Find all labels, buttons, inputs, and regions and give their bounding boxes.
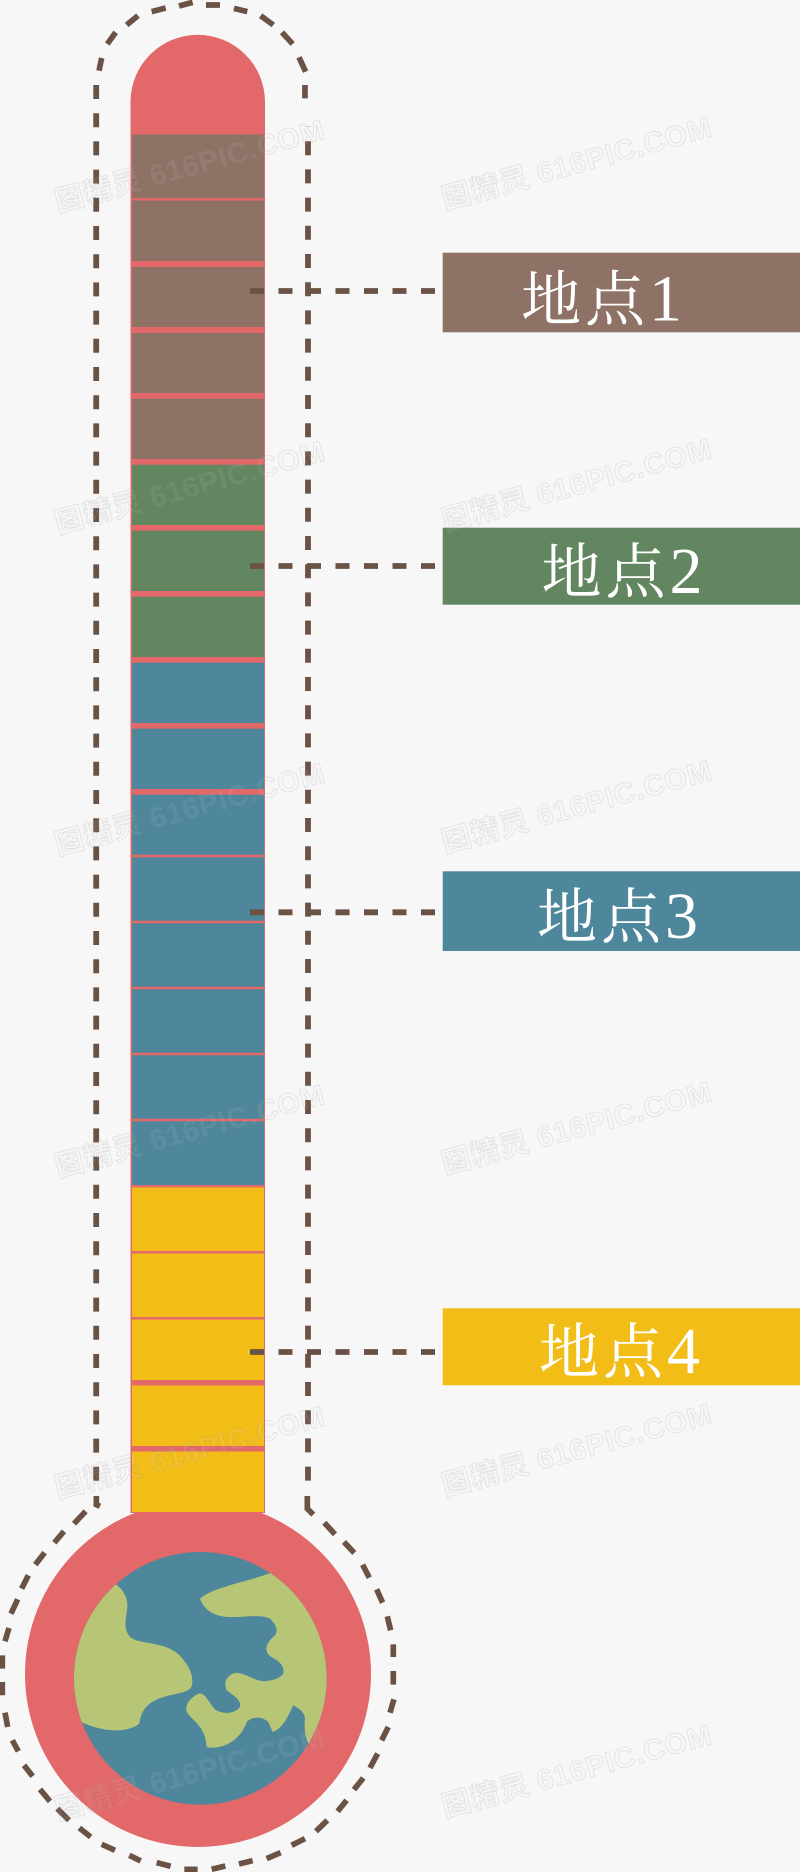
watermarks: 图精灵 616PIC.COM bbox=[51, 1400, 328, 1505]
watermarks: 图精灵 616PIC.COM bbox=[51, 1722, 328, 1827]
bulb bbox=[25, 1501, 371, 1847]
watermarks: 图精灵 616PIC.COM bbox=[438, 111, 715, 216]
watermarks: 图精灵 616PIC.COM bbox=[438, 754, 715, 859]
scale segments: location 2 bbox=[132, 465, 264, 657]
connector: location 3 bbox=[250, 909, 435, 915]
label: location 3: 地点3 bbox=[537, 880, 702, 953]
label: location 2 bbox=[443, 528, 800, 608]
watermarks: 图精灵 616PIC.COM bbox=[51, 114, 328, 219]
globe ocean bbox=[74, 1552, 327, 1805]
dashed outline: bulb ring bbox=[2, 1496, 394, 1869]
watermarks: 图精灵 616PIC.COM bbox=[438, 1719, 715, 1824]
connector: location 4 bbox=[250, 1349, 435, 1355]
dashed outline: top arch bbox=[99, 2, 306, 98]
scale segments: location 4 bbox=[132, 1188, 264, 1512]
label: location 1: 地点1 bbox=[521, 262, 686, 336]
watermarks: 图精灵 616PIC.COM bbox=[51, 1079, 328, 1184]
dashed thermometer outline bbox=[2, 2, 394, 1869]
tube body with rounded cap bbox=[130, 35, 265, 1513]
label: location 1 bbox=[443, 253, 800, 336]
icon: globe bbox=[74, 1552, 327, 1805]
watermarks: 图精灵 616PIC.COM bbox=[438, 433, 715, 538]
label: location 4 bbox=[443, 1308, 800, 1388]
scale segments: location 1 bbox=[132, 134, 264, 459]
label: location 4: 地点4 bbox=[539, 1315, 704, 1388]
watermarks: 图精灵 616PIC.COM bbox=[51, 757, 328, 862]
scale segments: location 3 bbox=[132, 663, 264, 1185]
dashed outline: left side bbox=[93, 85, 99, 1495]
watermarks bbox=[51, 111, 715, 1827]
globe land bbox=[74, 1573, 327, 1748]
watermarks: 图精灵 616PIC.COM bbox=[51, 435, 328, 540]
label: location 3 bbox=[443, 871, 800, 953]
dashed outline: right side bbox=[305, 127, 311, 1481]
watermarks: 图精灵 616PIC.COM bbox=[438, 1076, 715, 1181]
watermarks: 图精灵 616PIC.COM bbox=[438, 1398, 715, 1503]
connector: location 2 bbox=[250, 563, 435, 569]
thermometer bbox=[130, 35, 265, 1513]
connector: location 1 bbox=[250, 288, 435, 294]
label: location 2: 地点2 bbox=[542, 535, 706, 608]
